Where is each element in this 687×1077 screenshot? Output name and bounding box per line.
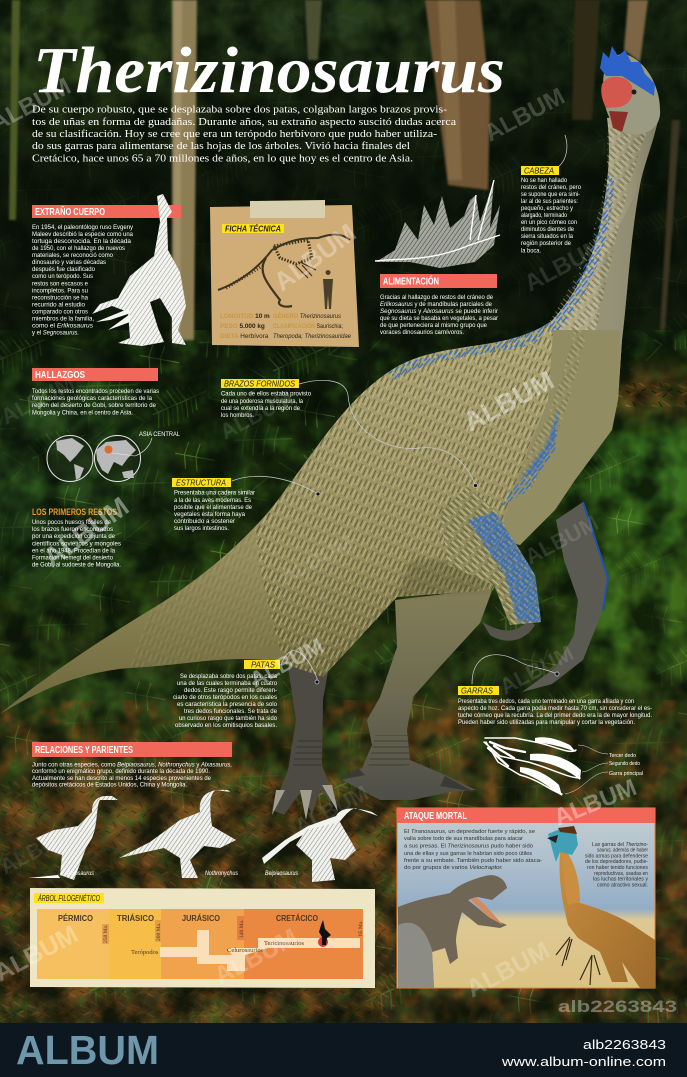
date labels: 65 Ma. — [358, 920, 364, 936]
watermarks: ALBUM — [38, 491, 134, 573]
body text: No se han hallado — [521, 177, 568, 184]
body text right: Las garras del Therizino- — [592, 842, 648, 848]
heading bar — [32, 368, 158, 381]
body text right: saurus, además de haber — [597, 848, 648, 854]
heading label: GARRAS — [461, 686, 494, 696]
body text: ciarlo de otros terópodos en los cuales — [173, 694, 277, 701]
heading bar: ATAQUE MORTAL — [404, 811, 467, 822]
date labels: 146 Ma. — [239, 919, 245, 938]
body text: restos del cráneo, pero — [521, 184, 582, 191]
body text: materiales, se reconoció como — [32, 252, 114, 259]
era labels: CRETÁCICO — [276, 914, 318, 923]
body text: en un pico córneo con — [521, 219, 578, 226]
intro text: de su clasificación. Hoy se cree que era un terópodo herbívoro que pudo haber utiliza- — [32, 128, 437, 140]
heading bar — [32, 742, 232, 757]
body text: En 1954, el paleontólogo ruso Evgeny — [32, 224, 134, 231]
body text: miembros de la familia, — [32, 316, 94, 322]
heading bar: ALIMENTACIÓN — [383, 274, 439, 288]
panel: ataque mortal — [397, 808, 655, 988]
tape — [250, 200, 325, 218]
era labels: PÉRMICO — [58, 914, 93, 923]
watermarks: alb2263843 — [558, 997, 677, 1016]
watermarks: ALBUM — [291, 780, 372, 839]
body text: después fue clasificado — [32, 266, 96, 273]
body text left: frente a su embate. También pudo haber sido ataca- — [404, 858, 542, 864]
body text: reconstrucción se ha — [32, 294, 89, 302]
branches — [160, 930, 360, 971]
human scale figure — [323, 270, 333, 309]
near leg and foot — [340, 588, 493, 800]
body text: Segnosaurus y Alxosaurus se puede inferir — [380, 308, 498, 315]
body text: dinosaurio y varias décadas — [32, 259, 106, 266]
body text: los hombros. — [221, 412, 254, 419]
body text: de una poderosa musculatura, la — [221, 398, 304, 405]
data rows: PESO 5.000 kg — [220, 323, 265, 330]
body text left: do por grupos de varios Velociraptor. — [404, 865, 503, 871]
body text: diminutos dientes de — [521, 226, 575, 233]
scene background — [397, 808, 655, 988]
near arm and claws — [440, 487, 541, 641]
body text: depósitos cretácicos de Estados Unidos, China y Mongolia. — [32, 782, 187, 788]
body text: dedos. Este rasgo permite diferen- — [184, 687, 277, 694]
website: www.album-online.com — [501, 1054, 666, 1069]
body text right: de los depredadores, pudie- — [585, 859, 648, 865]
heading label: ÁRBOL FILOGENÉTICO — [37, 894, 100, 903]
watermarks: ALBUM — [480, 83, 569, 147]
body text: alargado, terminado — [521, 212, 567, 219]
body text: tuche córneo que la recubría. La del primer dedo era la de mayor longitud. — [458, 712, 652, 719]
body text right: sido armas para defenderse — [585, 854, 648, 860]
body text: tres dedos funcionales. Se trata de — [184, 708, 278, 715]
watermarks: ALBUM — [550, 774, 641, 832]
body text: región del desierto de Gobi, sobre territorio de — [32, 402, 157, 409]
paper card — [210, 205, 359, 347]
heading bar — [397, 808, 655, 823]
panel: ficha técnica — [210, 200, 359, 347]
body text — [32, 224, 134, 336]
claw labels — [565, 745, 643, 794]
body text: a la de las aves modernas. Es — [174, 497, 251, 504]
body text: aspecto de hoz. Cada garra podía medir hasta 70 cm, sin considerar el es- — [458, 705, 652, 712]
era labels: TRIÁSICO — [117, 914, 154, 923]
panel: garras — [458, 686, 652, 796]
intro text: De su cuerpo robusto, que se desplazaba sobre dos patas, colgaban largos brazos provis- — [32, 104, 447, 116]
panel: cabeza — [521, 166, 582, 254]
claw labels: Segundo dedo — [609, 761, 640, 767]
chest and belly — [497, 320, 620, 545]
body text: Junto con otras especies, como Beipiaosaurus, Nothronychus y Alxasaurus, — [32, 762, 232, 768]
branch labels — [131, 940, 304, 956]
body with tail and fur — [0, 322, 565, 714]
branch labels: Terópodos — [131, 949, 159, 956]
body text: pequeño, estrecho y — [521, 205, 574, 212]
body text — [380, 294, 498, 336]
heading label: ESTRUCTURA — [176, 478, 226, 488]
body text left: a sus presas. El Therizinosaurus pudo haber sido — [404, 844, 533, 850]
body text — [521, 177, 582, 254]
heading label: BRAZOS FORNIDOS — [224, 380, 296, 388]
watermarks: ALBUM — [496, 640, 577, 699]
heading label: FICHA TÉCNICA — [225, 224, 281, 234]
logo: ALBUM — [16, 1027, 159, 1073]
watermarks: ALBUM — [521, 510, 602, 569]
image id: alb2263843 — [583, 1037, 666, 1052]
body text: Actualmente se han descrito al menos 14 especies provenientes de — [32, 775, 212, 782]
body text: como un terópodo. Sus — [32, 273, 93, 280]
branch labels: Celurosaurios — [227, 947, 264, 954]
body text — [174, 490, 255, 532]
panel: hallazgos — [32, 368, 181, 568]
body text: los brazos fueron encontrados — [32, 526, 113, 533]
era labels: JURÁSICO — [182, 914, 220, 923]
data rows: GÉNERO Therizinosaurus — [273, 311, 342, 320]
body text: vegetales esta forma haya — [174, 511, 246, 518]
far arm and claw — [522, 502, 608, 692]
body text: y el Segnosaurus. — [32, 330, 79, 336]
body text: una de las cuales terminaba en cuatro — [177, 680, 278, 687]
body text right: como atractivo sexual. — [597, 882, 648, 888]
body text: contribuido a sostener — [174, 518, 235, 525]
title: Therizinosaurus — [33, 34, 505, 107]
panel: extraño cuerpo — [32, 194, 186, 346]
body text: por una expedición conjunta de — [32, 533, 116, 540]
panel: alimentación — [375, 180, 500, 336]
skeleton: alxasaurus — [28, 796, 118, 880]
species labels: Alxosaurus — [66, 870, 94, 877]
date labels — [102, 916, 364, 944]
heading bar: HALLAZGOS — [35, 370, 85, 381]
body text: Formación Nemegt del desierto — [32, 554, 114, 562]
body text: Gracias al hallazgo de restos del cráneo de — [380, 294, 494, 301]
skeleton drawing — [218, 234, 350, 307]
era labels — [58, 914, 318, 923]
date labels: 200 Ma. — [156, 922, 162, 941]
body text: restos son escasos e — [32, 280, 89, 288]
body text: Se desplazaba sobre dos patas, cada — [180, 673, 278, 680]
body text: como el Erlikosaurus — [32, 322, 93, 330]
heading label: CABEZA — [524, 166, 554, 176]
branch labels: Tericinosaurios — [264, 940, 304, 947]
watermarks: ALBUM — [268, 217, 361, 297]
body text left: una de ellas y sus garras le habrían sido poco útiles — [404, 851, 532, 857]
map label: ASIA CENTRAL — [139, 431, 181, 438]
data rows: DIETA Herbívora — [220, 333, 269, 340]
therizinosaurus figure — [547, 826, 655, 988]
body text: Erlikosaurus y de mandíbulas parciales de — [380, 301, 493, 308]
watermarks: ALBUM — [210, 923, 303, 990]
data rows — [220, 311, 351, 340]
heading label: PATAS — [251, 660, 276, 670]
dinosaur marker — [318, 920, 331, 947]
claw skeleton sketch — [484, 737, 581, 796]
intro text: Cretácico, hace unos 65 a 70 millones de años, en lo que hoy es el centro de Asia. — [32, 152, 413, 164]
panel: estructura — [172, 478, 255, 532]
tyrannosaurus — [398, 875, 507, 988]
heading label — [34, 893, 104, 903]
body text: Presentaba una cadera similar — [174, 490, 255, 496]
body text: Presentaba tres dedos, cada uno terminado en una garra afilada y con — [458, 698, 634, 705]
body text: Unos pocos huesos fósiles de — [32, 519, 112, 526]
data rows: Theropoda; Therizinosauridae — [273, 333, 351, 340]
watermarks: ALBUM — [216, 385, 297, 444]
intro text — [32, 104, 456, 164]
intro text: do sus garras para alimentarse de las hojas de los árboles. Vivió hacia finales del — [32, 140, 410, 152]
data rows: LONGITUD 10 m — [220, 313, 270, 320]
body text: es característica la presencia de solo — [177, 701, 278, 708]
panel: patas — [173, 660, 280, 729]
body text: observado en los ornitisquios basales. — [175, 722, 277, 729]
heading bar: RELACIONES Y PARIENTES — [35, 745, 133, 756]
watermarks: ALBUM — [246, 633, 327, 692]
claw labels: Garra principal — [609, 771, 643, 777]
watermarks: ALBUM — [459, 365, 559, 437]
watermarks: ALBUM — [520, 233, 609, 297]
watermarks: ALBUM — [276, 530, 357, 589]
body text left: El Tiranosaurus, un depredador fuerte y rápido, se — [404, 829, 535, 835]
heading bar — [32, 205, 181, 218]
far leg and foot — [272, 640, 338, 820]
claw labels: Tercer dedo — [609, 753, 636, 759]
dinosaur illustration — [0, 46, 660, 820]
globes map — [47, 436, 152, 482]
panel: árbol filogenético — [30, 888, 375, 988]
body text — [32, 519, 121, 568]
body text — [173, 673, 278, 729]
body text: sus largos intestinos. — [174, 525, 229, 532]
skeleton: beipiaosaurus — [262, 808, 378, 882]
neck — [535, 110, 660, 420]
body text: posible que el alimentarse de — [174, 504, 253, 511]
species labels: Beipiaosaurus — [265, 870, 298, 877]
skeleton sketch — [92, 194, 186, 346]
body text — [458, 698, 652, 726]
body text right — [585, 842, 648, 888]
body text: científicos soviéticos y mongoles — [32, 540, 121, 548]
body text: Maleev describió la especie como una — [32, 231, 134, 238]
body text left: valía sobre todo de sus mandíbulas para atacar — [404, 836, 523, 842]
body text: tortuga desconocida. En la década — [32, 238, 132, 245]
body text: de Gobi, al sudoeste de Mongolia. — [32, 562, 121, 568]
species labels: Nothronychus — [205, 870, 238, 877]
body text right: las luchas territoriales y — [593, 876, 648, 882]
body text: sierra situados en la — [521, 233, 574, 240]
head with crest — [600, 46, 660, 135]
body text: que su dieta se basaba en vegetales, a pesar — [380, 315, 498, 322]
body text: lar al de sus parientes: — [521, 198, 578, 205]
body text: comparado con otros — [32, 308, 88, 316]
body text: Mongolia y China, en el centro de Asia. — [32, 410, 133, 416]
body text: formaciones geológicas características de la — [32, 395, 153, 402]
panel background — [30, 888, 375, 988]
body text: Cada uno de ellos estaba provisto — [221, 390, 312, 398]
timeline bands — [37, 909, 363, 979]
leader lines to body — [232, 135, 567, 684]
body text: conformó un enigmático grupo, definido durante la década de 1990. — [32, 768, 210, 775]
intro text: tos de uñas en forma de guadañas. Durante años, su extraño aspecto suscitó dudas acerca — [32, 116, 456, 128]
date labels: 250 Ma. — [103, 924, 109, 943]
heading bar: EXTRAÑO CUERPO — [35, 205, 105, 218]
body text left — [404, 829, 542, 871]
body text: de 1950, con el hallazgo de nuevos — [32, 245, 125, 252]
panel: brazos fornidos — [221, 379, 312, 419]
body text: la boca. — [521, 248, 541, 254]
body text right: reproductivas, usadas en — [594, 871, 648, 877]
body text — [32, 762, 232, 788]
body text right: ron haber tenido funciones — [587, 865, 648, 871]
data rows: CLASIFICACIÓN Saurischia; — [273, 321, 343, 330]
body text: Todos los restos encontrados proceden de varias — [32, 388, 159, 395]
tree trunks — [9, 0, 680, 340]
body text: Pueden haber sido utilizadas para manipular y cortar la vegetación. — [458, 719, 635, 726]
body text — [221, 390, 312, 419]
body text — [32, 388, 159, 416]
foliage sketch — [375, 180, 500, 268]
body text: se supone que era simi- — [521, 191, 580, 198]
sub-heading: LOS PRIMEROS RESTOS — [32, 507, 117, 517]
body text: un curioso rasgo que también ha sido — [179, 715, 278, 722]
body text: cual se extendía a la región de — [221, 405, 301, 412]
species labels — [66, 870, 298, 877]
panel: relaciones y parientes — [28, 742, 378, 882]
body text: incompletos. Para su — [32, 288, 89, 294]
body text: de que perteneciera al mismo grupo que — [380, 322, 488, 329]
skeleton: nothronychus — [119, 790, 236, 878]
heading bar — [380, 274, 497, 288]
body text: región posterior de — [521, 240, 572, 247]
body text: voraces dinosaurios carnívoros. — [380, 329, 464, 336]
body text: en el año 1948. Procedían de la — [32, 548, 116, 554]
watermarks: ALBUM — [462, 936, 555, 1003]
footer band — [0, 1023, 687, 1077]
body text: recurrido al estudio — [32, 302, 86, 308]
